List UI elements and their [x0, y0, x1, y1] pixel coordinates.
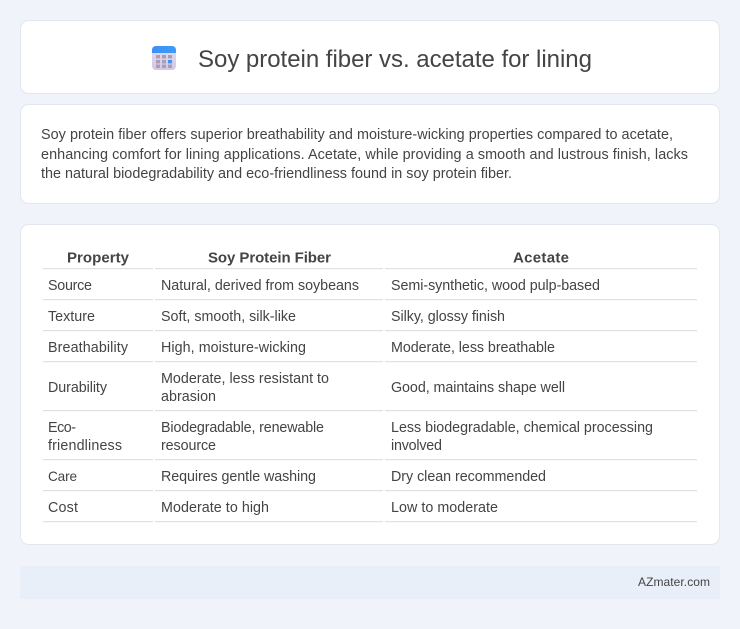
panel: title card [20, 20, 720, 94]
row: durability [48, 371, 565, 405]
text block: summary paragraph: enhancing comfort for lining applications. Acetate, while providing a smooth and lustrous finish, lacks [41, 147, 688, 163]
row: care [48, 469, 546, 485]
table header [67, 250, 569, 266]
row: cost: Cost [48, 500, 78, 516]
text block: summary paragraph: Soy protein fiber offers superior breathability and moisture-wicking properties compared to acetate, [41, 127, 673, 143]
row: source [48, 278, 600, 294]
row: source: Source [48, 278, 92, 294]
row: breathability [48, 340, 555, 356]
row: durability: Good, maintains shape well [391, 380, 565, 396]
row: texture: Silky, glossy finish [391, 309, 505, 325]
row: durability: Durability [48, 380, 108, 396]
row: eco-friendliness: Less biodegradable, chemical processing [391, 420, 653, 436]
text block: summary paragraph [41, 127, 688, 182]
row: breathability: Moderate, less breathable [391, 340, 555, 356]
footer credit: AZmater.com [638, 575, 710, 589]
row: eco-friendliness: involved [391, 438, 442, 454]
row: source: Semi-synthetic, wood pulp-based [391, 278, 600, 294]
row: breathability: High, moisture-wicking [161, 340, 306, 356]
row: eco-friendliness [48, 420, 653, 454]
row: durability: abrasion [161, 389, 216, 405]
footer bar [20, 566, 720, 599]
panel: summary [20, 104, 720, 204]
row: cost: Moderate to high [161, 500, 269, 516]
table header: Soy Protein Fiber [208, 250, 331, 266]
table header: Property [67, 250, 130, 266]
row: durability: Moderate, less resistant to [161, 371, 329, 387]
row: cost: Low to moderate [391, 500, 498, 516]
row: source: Natural, derived from soybeans [161, 278, 359, 294]
row: cost [48, 500, 498, 516]
row: care: Care [48, 469, 77, 484]
row: breathability: Breathability [48, 340, 129, 356]
row: texture: Texture [48, 309, 95, 325]
row: eco-friendliness: Eco- [48, 420, 76, 436]
row: eco-friendliness: resource [161, 438, 216, 454]
row: care: Requires gentle washing [161, 469, 316, 485]
row: eco-friendliness: friendliness [48, 438, 122, 454]
row: care: Dry clean recommended [391, 469, 546, 485]
text block: summary paragraph: the natural biodegradability and eco-friendliness found in soy protein fiber. [41, 166, 512, 182]
row: texture [48, 309, 505, 325]
row: texture: Soft, smooth, silk-like [161, 309, 296, 325]
row: eco-friendliness: Biodegradable, renewable [161, 420, 324, 436]
icon: calendar [152, 46, 176, 70]
panel: comparison table [20, 224, 720, 544]
table header: Acetate [513, 250, 569, 266]
title: Soy protein fiber vs. acetate for lining [198, 46, 592, 73]
